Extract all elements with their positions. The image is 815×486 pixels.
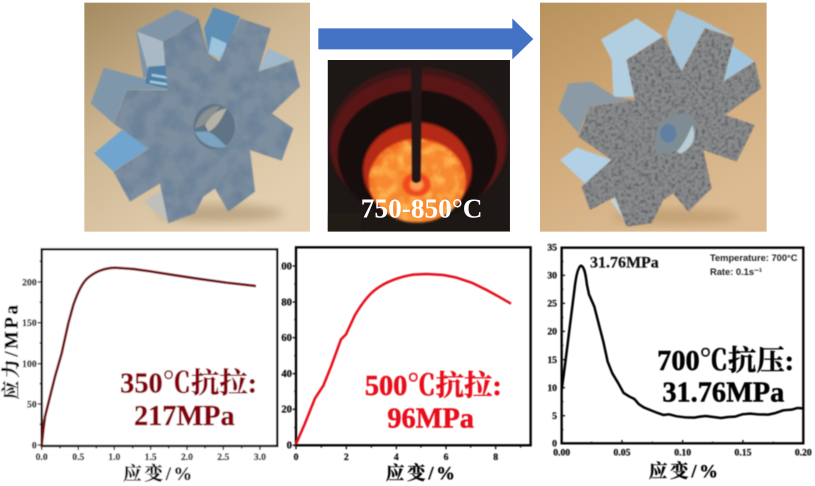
gear bore hole [194, 104, 235, 149]
y tick labels: 100 [22, 359, 37, 370]
x tick labels [553, 448, 812, 459]
y tick labels: 200 [22, 277, 37, 288]
y tick labels: 80 [281, 297, 292, 308]
photo: original gear [84, 3, 310, 232]
y tick labels: 5 [552, 411, 557, 422]
y tick labels: 20 [547, 327, 557, 338]
y tick labels: 50 [27, 399, 37, 410]
test conditions legend: Rate: 0.1s⁻¹ [710, 267, 762, 277]
corroded gear front face [578, 28, 761, 227]
x tick labels: 0.20 [795, 448, 812, 459]
x tick labels: 0.10 [674, 448, 691, 459]
x tick labels [293, 452, 499, 461]
y tick labels: 10 [547, 383, 557, 394]
ticks [562, 261, 773, 443]
x tick labels: 0.0 [36, 452, 48, 463]
callout: 31.76MPa [662, 378, 784, 409]
y tick labels: 0 [287, 441, 292, 452]
y tick labels: 100 [276, 261, 292, 272]
callout [120, 368, 257, 432]
y tick labels [280, 262, 292, 450]
x tick labels: 1.5 [145, 452, 157, 463]
furnace rod [411, 60, 422, 183]
y tick labels: 30 [547, 271, 557, 282]
x tick labels: 0.00 [553, 448, 570, 459]
y tick labels: 20 [281, 405, 292, 416]
x axis title: 应变/% [123, 463, 195, 485]
y tick labels: 0 [32, 440, 37, 451]
stress-strain curve [296, 274, 511, 444]
x tick labels: 8 [493, 452, 498, 463]
chart: 500C tensile [276, 247, 531, 484]
y tick labels: 0 [552, 439, 557, 450]
photo: furnace [328, 60, 510, 232]
stress-strain curve [562, 266, 803, 418]
y tick labels [547, 243, 557, 450]
test conditions legend: Temperature: 700°C [710, 253, 798, 263]
axes frame [562, 248, 803, 443]
arrow [318, 18, 533, 59]
photo: corroded gear [540, 3, 767, 232]
x tick labels: 0.15 [735, 448, 752, 459]
x tick labels: 6 [444, 452, 449, 463]
y tick labels: 150 [22, 318, 37, 329]
callout [657, 345, 794, 409]
y axis title: 应力/MPa [1, 302, 22, 399]
corroded gear bore hole [655, 114, 696, 155]
chart: 700C compression [547, 243, 812, 483]
x tick labels: 2.0 [181, 452, 193, 463]
x axis title: 应变/% [649, 461, 721, 483]
x tick labels: 2.5 [217, 452, 230, 463]
axes frame [42, 249, 277, 446]
ticks [38, 261, 260, 450]
callout: 500℃抗拉: [365, 370, 502, 402]
callout [365, 370, 502, 435]
y tick labels: 25 [547, 299, 557, 310]
ticks [293, 266, 521, 449]
test conditions legend [710, 253, 798, 277]
callout: 350℃抗拉: [120, 368, 257, 400]
callout: 700℃抗压: [657, 345, 794, 377]
chart: 350C tensile [0, 245, 289, 486]
peak label: 31.76MPa [590, 255, 659, 272]
x tick labels: 3.0 [254, 452, 266, 463]
x tick labels [36, 452, 266, 463]
gear front face [113, 18, 300, 223]
callout: 96MPa [387, 404, 474, 435]
y tick labels: 35 [547, 243, 557, 254]
x tick labels: 1.0 [108, 452, 121, 463]
y tick labels: 60 [281, 333, 292, 344]
callout: 217MPa [134, 401, 235, 432]
y tick labels [22, 277, 37, 451]
x tick labels: 0 [294, 452, 299, 463]
x tick labels: 4 [394, 452, 399, 463]
axes frame [296, 247, 531, 445]
x tick labels: 0.5 [72, 452, 85, 463]
stress-strain curve [42, 268, 256, 445]
x tick labels: 2 [344, 452, 349, 463]
temperature label: 750-850°C [361, 193, 483, 223]
x tick labels: 0.05 [614, 448, 631, 459]
y tick labels: 40 [281, 369, 292, 380]
x axis title: 应变/% [386, 462, 458, 484]
y tick labels: 15 [547, 355, 557, 366]
